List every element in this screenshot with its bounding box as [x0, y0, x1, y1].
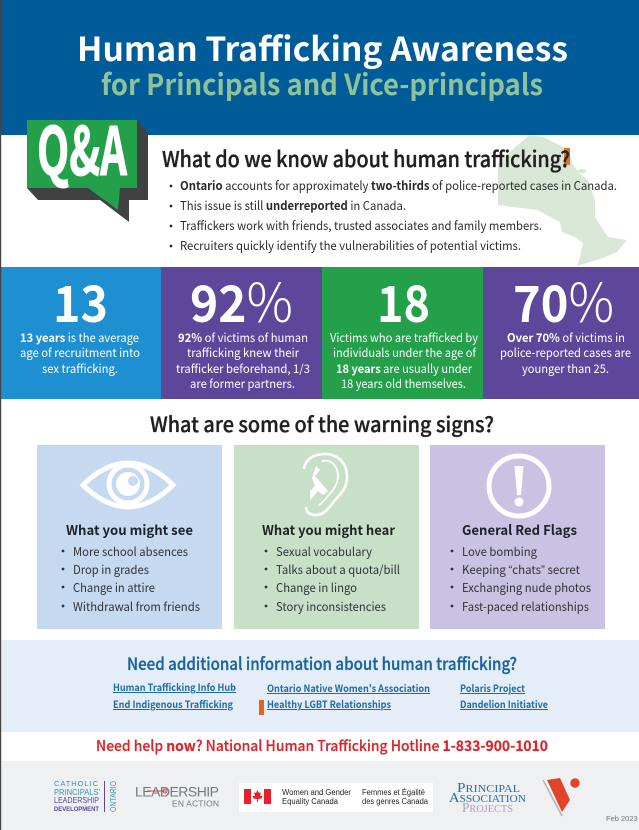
list: Sexual vocabulary — [276, 543, 372, 560]
list: Withdrawal from friends — [73, 598, 200, 615]
panel: statistic 18: 18 — [377, 265, 430, 337]
panel: statistic 13 — [0, 265, 161, 399]
links: Dandelion Initiative — [460, 696, 548, 711]
logo: Leadership en Action — [135, 784, 219, 808]
list: Change in lingo — [276, 579, 357, 596]
logo: Principal Association Projects: PROJECTS — [462, 801, 513, 816]
panel: statistic 92% — [161, 259, 322, 399]
footer logos — [0, 761, 639, 830]
marker: orange highlight — [564, 148, 570, 165]
logo: red V mark — [543, 778, 580, 816]
icon: Canadian flag — [244, 789, 271, 804]
panel: statistic 70%: Over 70% of victims in — [507, 329, 625, 346]
panel: statistic 18: 18 years are usually under — [336, 360, 472, 377]
bullet list: Ontario accounts for approximately two-thirds of police-reported cases in Canada. — [180, 177, 617, 194]
panel: statistic 13: age of recruitment into — [20, 344, 140, 361]
panel: statistic 92%: are former partners. — [190, 375, 295, 392]
list — [62, 543, 200, 615]
logo: Leadership en Action: LEADERSHIP — [135, 784, 219, 800]
list: Exchanging nude photos — [462, 579, 591, 596]
subtitle: for Principals and Vice-principals — [101, 62, 543, 104]
panel: general red flags — [430, 445, 605, 629]
panel: statistic 92%: 92% of victims of human — [178, 329, 308, 346]
logo: Women and Gender Equality Canada: des genres Canada — [362, 797, 429, 806]
links: Ontario Native Women's Association — [267, 680, 430, 695]
panel: what you might see — [37, 445, 222, 629]
list: Story inconsistencies — [276, 598, 386, 615]
map: Ontario silhouette — [498, 135, 627, 266]
bullet list: Traffickers work with friends, trusted associates and family members. — [180, 217, 542, 234]
logo: Catholic Principals' Leadership Development: ONTARIO — [108, 781, 118, 812]
icon: exclamation mark — [489, 456, 549, 516]
panel: statistic 13: 13 years is the average — [20, 329, 139, 346]
links — [113, 679, 548, 711]
logo: Women and Gender Equality Canada: Femmes et Égalité — [362, 788, 426, 797]
logo: Catholic Principals' Leadership Development: CATHOLIC — [54, 779, 99, 788]
panel: statistic 13: sex trafficking. — [42, 360, 118, 377]
heading: Need additional information about human trafficking? — [127, 650, 517, 675]
list — [265, 543, 400, 615]
list: Change in attire — [73, 579, 155, 596]
panel: statistic 92%: trafficker beforehand, 1/3 — [176, 360, 310, 377]
icon: Q&A speech bubble — [27, 99, 148, 222]
marker: orange bar — [259, 700, 264, 715]
panel: what you might hear: What you might hear — [262, 519, 395, 539]
heading: What do we know about human trafficking? — [162, 142, 570, 174]
links: End Indigenous Trafficking — [113, 696, 233, 711]
heading: warning signs: What are some of the warning signs? — [150, 409, 494, 439]
logo: Principal Association Projects: PRINCIPAL — [457, 781, 520, 796]
title: Human Trafficking Awareness — [77, 23, 568, 71]
list: Drop in grades — [73, 561, 149, 578]
logo: Principal Association Projects: ASSOCIATION — [449, 791, 526, 806]
panel: statistic 18: Victims who are trafficked by — [330, 329, 478, 346]
panel: statistic 70%: 70% — [513, 259, 614, 338]
bullet list: This issue is still underreported in Canada. — [180, 197, 406, 214]
logo: Women and Gender Equality Canada: Women and Gender — [282, 788, 351, 797]
panel: statistic 13: 13 — [53, 265, 108, 337]
panel: statistic 92%: trafficking knew their — [187, 344, 299, 361]
list: Talks about a quota/bill — [276, 561, 400, 578]
panel: statistic 92%: 92% — [190, 259, 293, 338]
list: Keeping “chats” secret — [462, 561, 581, 578]
logo: Principal Association Projects — [449, 781, 526, 816]
logo: Catholic Principals' Leadership Development: PRINCIPALS' — [54, 788, 100, 797]
list — [451, 543, 591, 615]
logo: Catholic Principals' Leadership Development: LEADERSHIP — [54, 796, 99, 805]
list: Love bombing — [462, 543, 537, 560]
logo: Leadership en Action: EN ACTION — [172, 798, 219, 808]
panel: statistic 18: individuals under the age of — [333, 344, 477, 361]
panel: what you might hear — [234, 445, 419, 629]
panel: statistic 18 — [322, 265, 483, 399]
panel: statistic 18: 18 years old themselves. — [341, 375, 466, 392]
panel: statistic 70%: younger than 25. — [522, 360, 609, 377]
links: Human Trafficking Info Hub — [113, 679, 236, 694]
panel: statistic 70% — [483, 259, 639, 399]
logo: Women and Gender Equality Canada — [239, 783, 433, 812]
panel: additional information — [0, 640, 639, 732]
bullet list — [170, 177, 617, 254]
icon: ear — [304, 454, 347, 515]
links: Healthy LGBT Relationships — [267, 696, 391, 711]
bullet list: Recruiters quickly identify the vulnerabilities of potential victims. — [180, 237, 521, 254]
list: Fast-paced relationships — [462, 598, 589, 615]
logo: Catholic Principals' Leadership Development — [54, 779, 118, 813]
date: Feb 2023 — [606, 814, 638, 823]
panel: what do we know — [162, 142, 617, 254]
header banner — [0, 0, 639, 135]
icon: Q&A speech bubble: Q&A — [37, 99, 127, 195]
panel: statistic 70%: police-reported cases are — [500, 344, 631, 361]
icon: eye — [83, 463, 173, 507]
logo: Catholic Principals' Leadership Development: DEVELOPMENT — [54, 806, 99, 813]
panel: general red flags: General Red Flags — [462, 519, 577, 539]
links: Polaris Project — [460, 680, 526, 695]
logo: Women and Gender Equality Canada: Equality Canada — [282, 797, 339, 806]
hotline: Need help now? National Human Trafficking Hotline 1-833-900-1010 — [96, 735, 548, 756]
panel: what you might see: What you might see — [66, 519, 193, 539]
list: More school absences — [73, 543, 188, 560]
